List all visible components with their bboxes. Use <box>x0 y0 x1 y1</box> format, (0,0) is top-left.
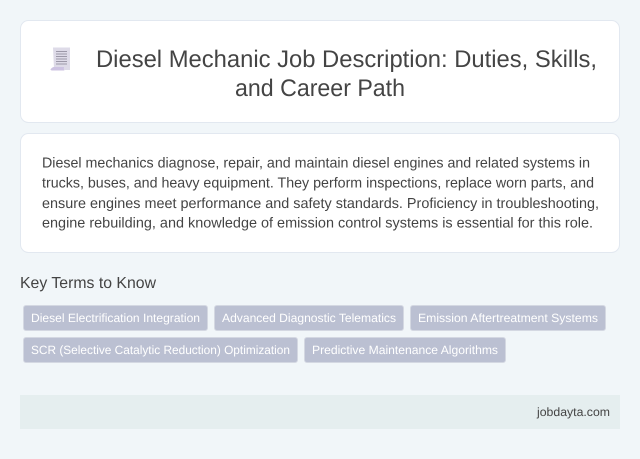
description text: Diesel mechanics diagnose, repair, and maintain diesel engines and related systems in <box>42 156 590 172</box>
description text <box>42 156 599 232</box>
footer: jobdayta.com <box>536 405 610 419</box>
panel: key term tags <box>24 306 606 362</box>
description text: trucks, buses, and heavy equipment. They perform inspections, replace worn parts, and <box>42 176 594 192</box>
title: Diesel Mechanic Job Description: Duties, Skills, <box>96 46 597 73</box>
tag <box>410 306 606 330</box>
footer <box>20 395 620 429</box>
tag: Predictive Maintenance Algorithms <box>312 343 498 357</box>
description text: engine rebuilding, and knowledge of emission control systems is essential for this role. <box>42 216 593 232</box>
tag <box>24 338 298 362</box>
description text: ensure engines meet performance and safety standards. Proficiency in troubleshooting, <box>42 196 599 212</box>
heading: key terms: Key Terms to Know <box>20 275 156 292</box>
tag <box>214 306 404 330</box>
tag: SCR (Selective Catalytic Reduction) Optimization <box>31 343 290 357</box>
tag: Advanced Diagnostic Telematics <box>222 311 396 325</box>
panel: title card <box>20 20 620 122</box>
tag: Emission Aftertreatment Systems <box>418 311 598 325</box>
title: and Career Path <box>235 75 405 102</box>
title <box>96 46 597 102</box>
tag <box>24 306 208 330</box>
panel: description <box>20 134 620 252</box>
tag: Diesel Electrification Integration <box>31 311 200 325</box>
icon: document <box>50 48 70 70</box>
tag <box>304 338 506 362</box>
